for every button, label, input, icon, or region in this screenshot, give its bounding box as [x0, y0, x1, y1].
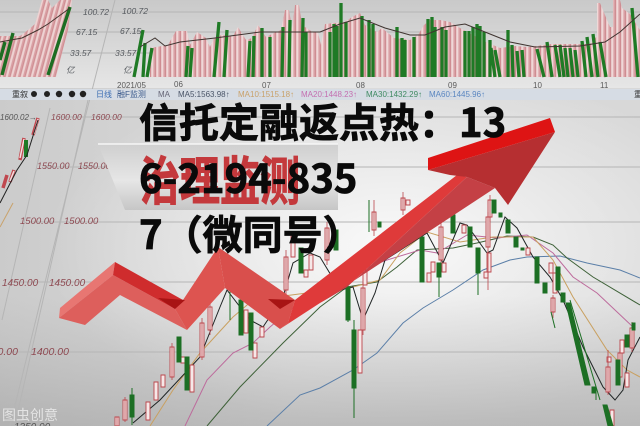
title: 6-2194-835 — [139, 147, 357, 205]
price axis labels: 1600.02→ — [0, 113, 37, 122]
volume axis labels: 67.15 — [76, 27, 98, 37]
watermark: 图虫创意 — [2, 407, 58, 423]
main panel: green candlesticks — [130, 200, 635, 426]
price axis labels: 1500.00 — [64, 216, 99, 227]
main panel: volume bars — [134, 0, 640, 77]
valley shadow — [158, 298, 185, 309]
title — [139, 91, 506, 261]
price axis labels: 1550.00 — [78, 161, 111, 171]
arrow: second falling face — [218, 247, 295, 329]
arrow: first fold — [113, 262, 183, 309]
volume axis labels — [66, 6, 148, 75]
valley shadow — [268, 299, 295, 309]
left panel: volume bars — [0, 0, 72, 77]
arrow: shaft upper side — [280, 175, 467, 329]
toolbar with moving average readings: MA20:1448.23↑ — [301, 90, 357, 99]
price axis labels — [0, 112, 122, 426]
date axis labels: 2021/05 — [117, 81, 146, 90]
left panel: candlesticks and moving averages — [0, 118, 38, 227]
date axis labels: 08 — [356, 81, 365, 90]
banner with red heading: 治理监测 — [140, 141, 300, 216]
arrow: second rising face — [175, 247, 225, 330]
volume axis labels: 100.72 — [83, 7, 109, 17]
volume axis labels: 100.72 — [122, 6, 148, 16]
date axis labels: 09 — [448, 81, 457, 90]
toolbar with moving average readings: MA5:1563.98↑ — [178, 90, 230, 99]
title: 7（微同号） — [139, 203, 363, 261]
toolbar with moving average readings: MA10:1515.18↑ — [238, 90, 294, 99]
price axis labels: 1500.00 — [20, 216, 55, 227]
arrow: shaft lower side — [320, 177, 495, 303]
price axis labels: 1600.00 — [51, 112, 82, 122]
volume axis labels: 亿 — [123, 65, 133, 75]
price axis labels: 1450.00 — [49, 278, 86, 289]
arrow: left flank — [59, 262, 115, 318]
price axis labels: 1450.00 — [2, 278, 39, 289]
date axis labels: 06 — [174, 80, 183, 89]
arrow: head top band — [428, 118, 555, 170]
price axis labels: 1400.00 — [31, 346, 69, 358]
price axis labels: 1600.00 — [91, 112, 122, 122]
price axis labels: 1550.00 — [37, 161, 70, 171]
title: 信托定融返点热：13 — [139, 91, 506, 149]
main panel: red candlesticks — [115, 192, 634, 426]
main panel: moving average lines — [133, 217, 640, 426]
toolbar with moving average readings: MA30:1432.29↑ — [366, 90, 422, 99]
toolbar with moving average readings — [0, 89, 640, 100]
toolbar with moving average readings: 融F监测 — [117, 89, 146, 99]
toolbar with moving average readings: 日线 — [96, 89, 112, 99]
date axis labels: 10 — [533, 81, 542, 90]
toolbar with moving average readings: MA60:1445.96↑ — [429, 90, 485, 99]
date axis labels: 07 — [262, 81, 271, 90]
volume axis labels: 亿 — [66, 65, 76, 75]
date axis labels — [117, 80, 609, 90]
volume axis labels: 33.57 — [115, 48, 137, 58]
toolbar with moving average readings: MA — [158, 90, 171, 99]
arrow: first front face — [59, 275, 187, 330]
arrow: head face — [428, 132, 555, 205]
red zigzag rising arrow — [59, 118, 555, 330]
banner with red heading — [98, 141, 338, 216]
volume axis labels: 67.15 — [120, 26, 142, 36]
toolbar with moving average readings: 重叙 — [12, 89, 28, 99]
date axis labels: 11 — [600, 81, 609, 90]
volume axis labels: 33.57 — [70, 48, 92, 58]
